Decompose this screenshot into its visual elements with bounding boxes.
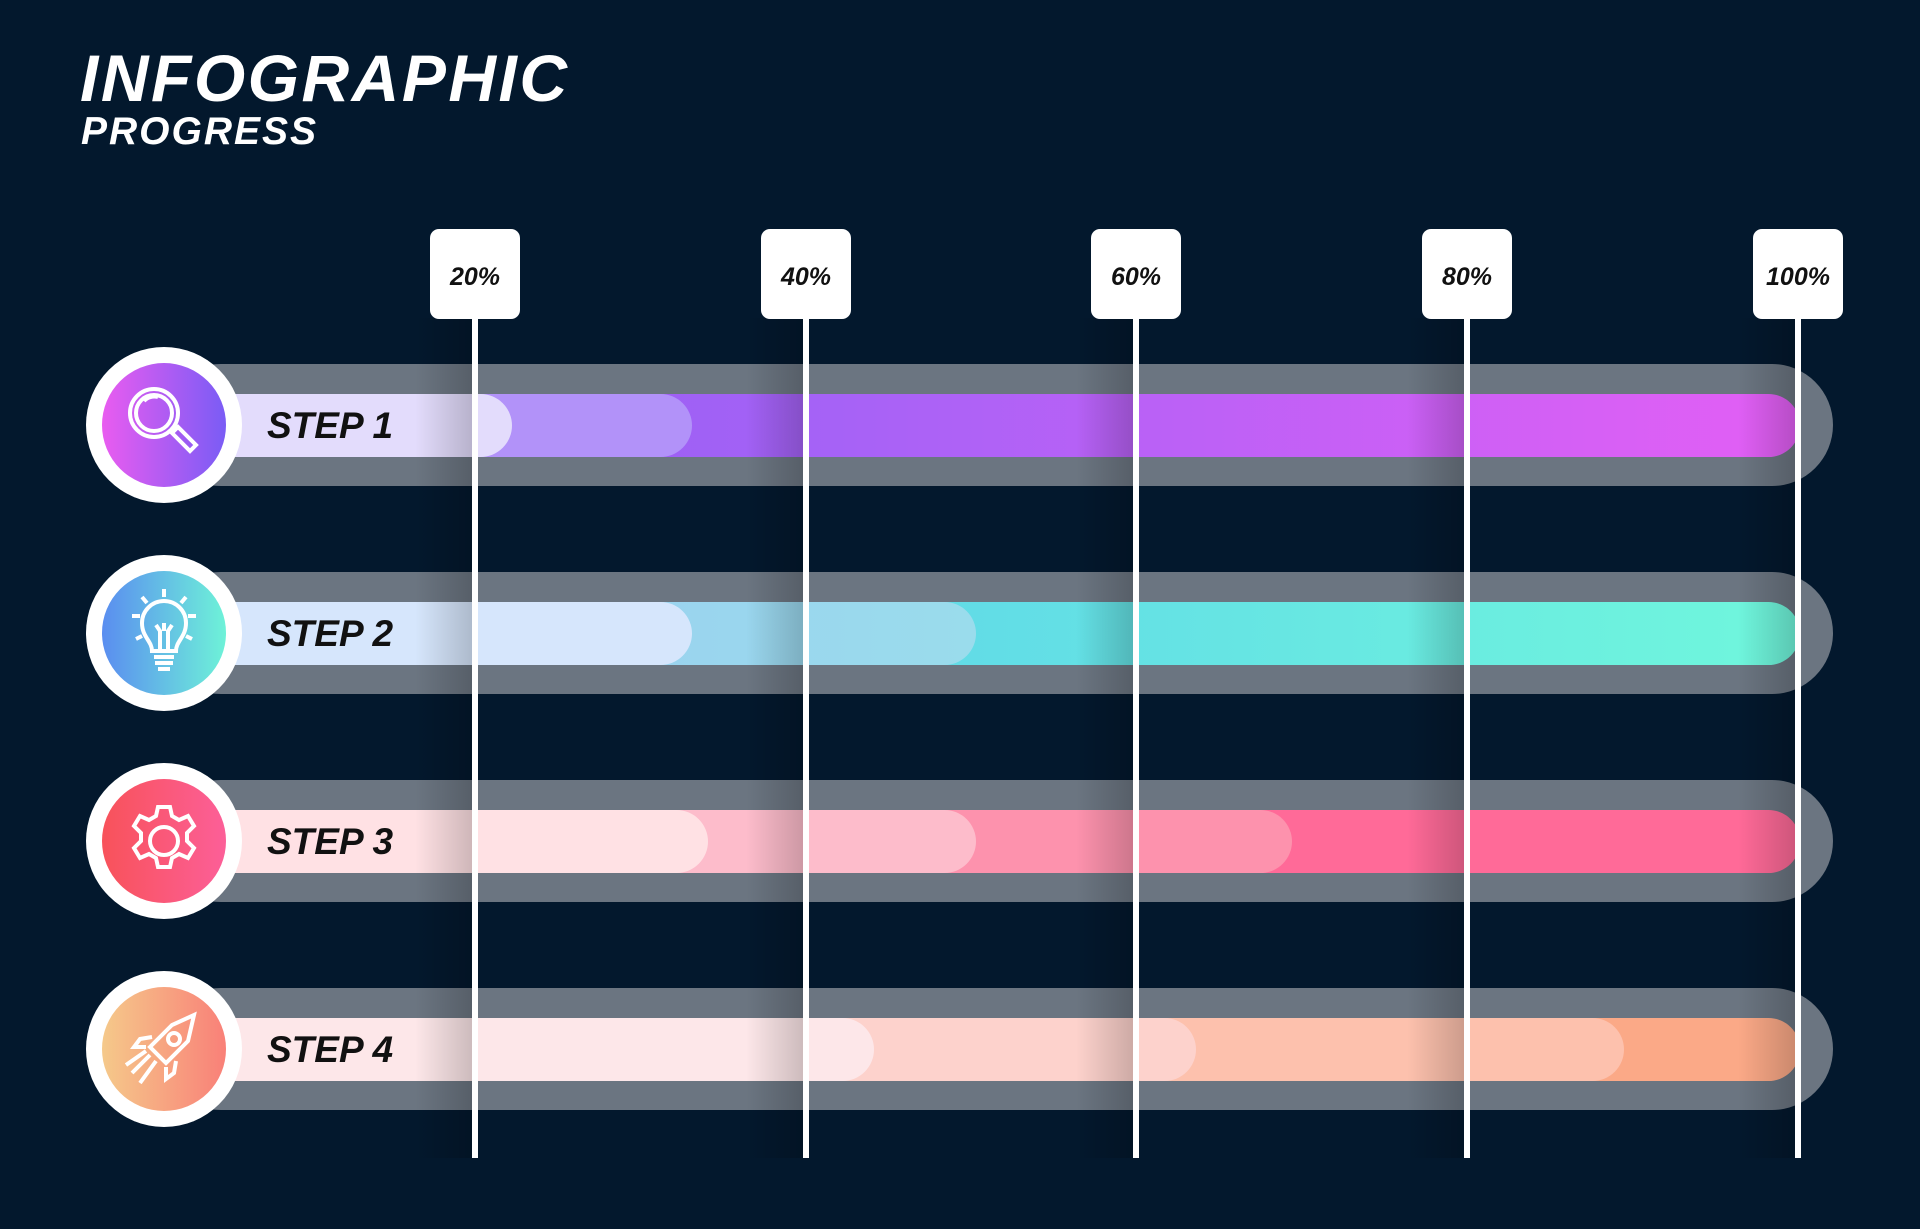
- percentage markers: 20%: [450, 263, 500, 291]
- row 4 track: [160, 988, 1833, 1110]
- row 4 bar: [235, 1018, 1795, 1081]
- step labels: STEP 4: [267, 1029, 393, 1070]
- row 1 track: [160, 364, 1833, 486]
- percentage markers: 100%: [1766, 263, 1830, 291]
- icon: bulb: [86, 555, 242, 711]
- row 3 track: [160, 780, 1833, 902]
- percentage markers: 60%: [1111, 263, 1161, 291]
- step labels: STEP 2: [267, 613, 393, 654]
- icon: magnifier: [86, 347, 242, 503]
- step labels: STEP 3: [267, 821, 393, 862]
- percentage markers: 40%: [781, 263, 831, 291]
- step labels: [267, 405, 393, 1070]
- row 1 bar: [235, 394, 1795, 457]
- shadows near lines: [425, 320, 1795, 1158]
- percentage markers: [430, 229, 1843, 1158]
- subtitle: PROGRESS: [81, 110, 318, 153]
- percentage markers: 80%: [1442, 263, 1492, 291]
- step labels: STEP 1: [267, 405, 393, 446]
- icon: rocket: [86, 971, 242, 1127]
- row 3 bar: [235, 810, 1795, 873]
- title: INFOGRAPHIC: [80, 41, 570, 115]
- row 2 bar: [235, 602, 1795, 665]
- row 2 track: [160, 572, 1833, 694]
- icon: gear: [86, 763, 242, 919]
